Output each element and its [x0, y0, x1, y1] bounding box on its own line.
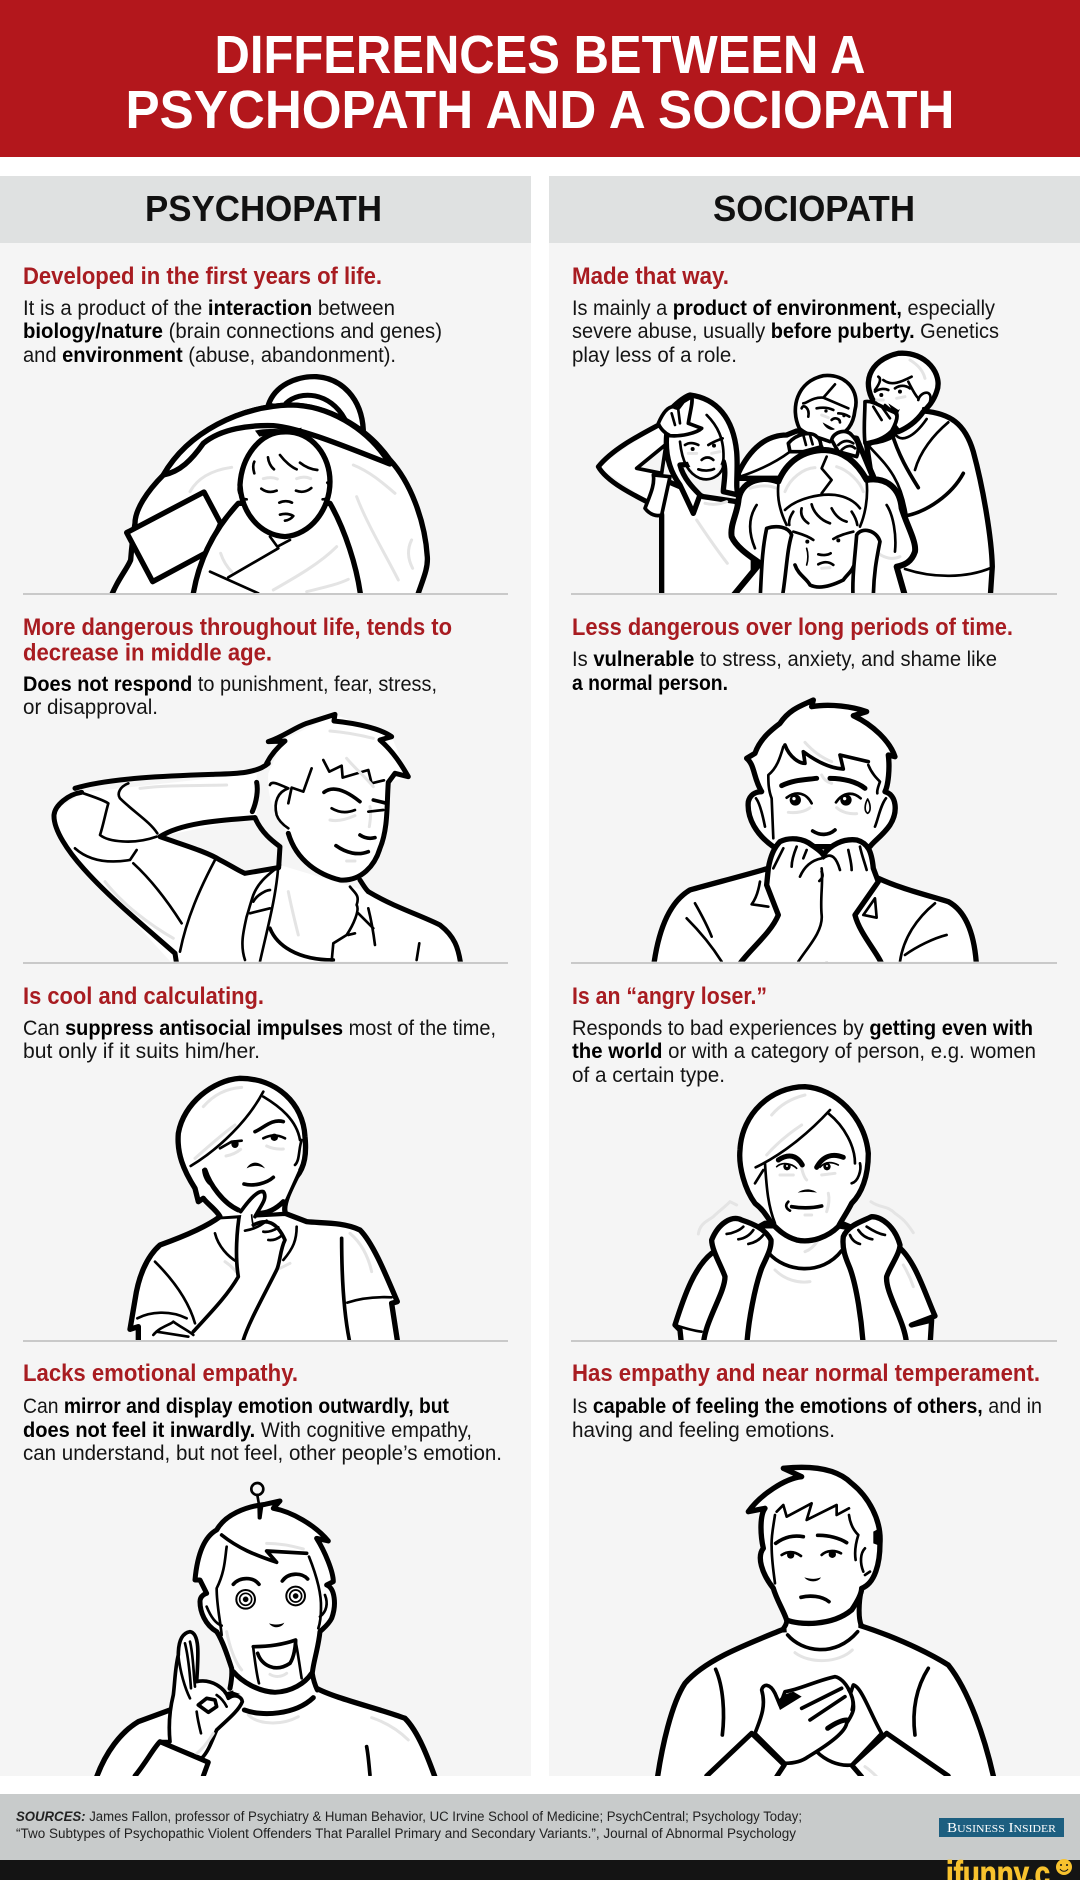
body text: Can suppress antisocial impulses most of the time, [23, 1017, 496, 1040]
subheading: Is cool and calculating. [23, 983, 264, 1010]
title banner: PSYCHOPATH AND A SOCIOPATH [126, 80, 954, 140]
icon part: girl with L sign [598, 395, 753, 602]
body text: Is mainly a product of environment, especially [572, 297, 995, 320]
source text: “Two Subtypes of Psychopathic Violent Offenders That Parallel Primary and Secondary Variants.”, Journal of Abnormal Psychology [16, 1826, 796, 1841]
panel: sociopath column [549, 176, 1080, 1783]
section: made that way [572, 263, 999, 602]
body text [23, 297, 442, 367]
subheading: Has empathy and near normal temperament. [572, 1360, 1040, 1387]
body text: of a certain type. [572, 1064, 725, 1087]
panel: psychopath column [0, 176, 531, 1782]
icon part: boy whispering [864, 353, 992, 602]
divider [23, 962, 508, 964]
body text: It is a product of the interaction between [23, 297, 395, 320]
source text [16, 1809, 802, 1841]
body text: Is vulnerable to stress, anxiety, and shame like [572, 648, 997, 671]
icon: sad man with hands on heart [657, 1467, 995, 1783]
heading: psychopath: PSYCHOPATH [145, 188, 382, 229]
section: less dangerous [572, 614, 1013, 968]
body text: does not feel it inwardly. With cognitive empathy, [23, 1419, 472, 1442]
section: cool and calculating [23, 983, 496, 1347]
logo: Business Insider [939, 1818, 1064, 1837]
subheading: decrease in middle age. [23, 640, 272, 666]
subheading: Lacks emotional empathy. [23, 1360, 298, 1387]
icon: children bullying a crying girl [598, 353, 992, 602]
section: developed in the first years [23, 263, 442, 605]
title banner [0, 0, 1080, 157]
body text: Responds to bad experiences by getting even with [572, 1017, 1033, 1040]
icon: relaxed man with hand behind head [53, 714, 461, 968]
body text [572, 1395, 1042, 1442]
icon part: boy laughing [738, 375, 875, 478]
heading: sociopath: SOCIOPATH [713, 188, 915, 229]
divider [23, 593, 508, 595]
body text: Does not respond to punishment, fear, stress, [23, 673, 437, 696]
section: angry loser [572, 983, 1036, 1347]
divider [571, 593, 1057, 595]
body text: play less of a role. [572, 344, 737, 367]
body text: or disapproval. [23, 696, 158, 719]
section: lacks emotional empathy [23, 1360, 502, 1782]
icon: person thinking with finger on chin [130, 1078, 398, 1347]
icon: wind-up man with hypnotic eyes making OK sign [95, 1483, 437, 1782]
body text: and environment (abuse, abandonment). [23, 344, 396, 367]
watermark bar [0, 1855, 1080, 1880]
subheading: Less dangerous over long periods of time. [572, 614, 1013, 641]
body text [23, 1017, 496, 1063]
body text: can understand, but not feel, other people’s emotion. [23, 1442, 502, 1465]
logo: Business Insider: BUSINESS INSIDER [947, 1820, 1056, 1835]
section: has empathy [572, 1360, 1042, 1783]
body text: a normal person. [572, 672, 728, 695]
body text: but only if it suits him/her. [23, 1040, 260, 1063]
section: more dangerous [23, 614, 461, 968]
body text [23, 673, 437, 719]
source text: SOURCES: James Fallon, professor of Psychiatry & Human Behavior, UC Irvine School of Medicine; PsychCentral; Psychology Today; [16, 1809, 802, 1824]
footer: sources [0, 1794, 1080, 1860]
subheading: Made that way. [572, 263, 729, 290]
body text [572, 648, 997, 695]
body text: having and feeling emotions. [572, 1419, 835, 1442]
title banner: DIFFERENCES BETWEEN A [214, 25, 866, 85]
icon: anxious boy biting nails [653, 700, 977, 968]
subheading [23, 614, 452, 666]
body text: severe abuse, usually before puberty. Genetics [572, 320, 999, 343]
body text: Is capable of feeling the emotions of others, and in [572, 1395, 1042, 1418]
subheading: Is an “angry loser.” [572, 983, 767, 1010]
body text [572, 1017, 1036, 1087]
divider [571, 962, 1057, 964]
icon part: crying girl [728, 450, 915, 602]
body text [23, 1395, 502, 1465]
body text: the world or with a category of person, e.g. women [572, 1040, 1036, 1063]
divider [571, 1340, 1057, 1342]
body text: biology/nature (brain connections and genes) [23, 320, 442, 343]
divider [23, 1340, 508, 1342]
icon: swaddled baby in carrier [108, 377, 427, 605]
body text [572, 297, 999, 367]
subheading: More dangerous throughout life, tends to [23, 614, 452, 641]
subheading: Developed in the first years of life. [23, 263, 382, 290]
icon: angry person with clenched fists [675, 1087, 935, 1347]
body text: Can mirror and display emotion outwardly, but [23, 1395, 449, 1418]
